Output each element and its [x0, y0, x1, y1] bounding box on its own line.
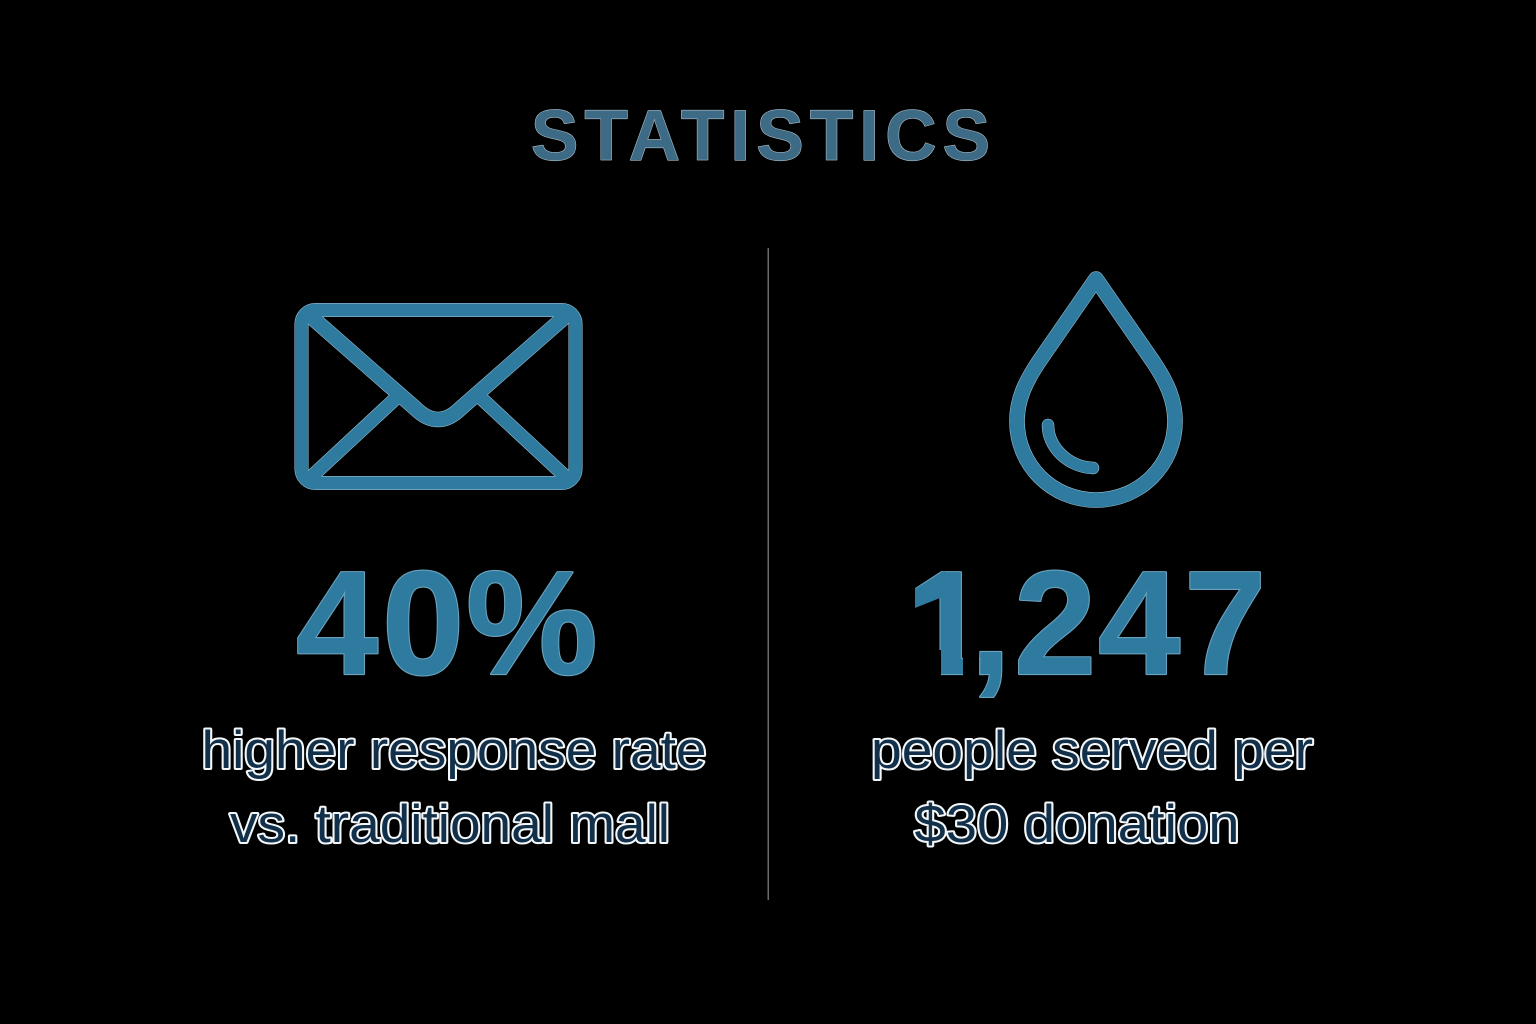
statistic: 40%: 40% [296, 541, 598, 706]
label: people served per: people served per [871, 721, 1313, 780]
title: STATISTICS [531, 97, 990, 176]
label: higher response rate: higher response rate [202, 721, 706, 780]
panel: response rate [202, 310, 706, 854]
label: vs. traditional mall: vs. traditional mall [230, 795, 670, 854]
divider [768, 248, 769, 900]
icon: envelope [302, 310, 576, 483]
statistic: 1,247: 1,247 [906, 541, 1266, 706]
panel: people served [871, 279, 1313, 854]
icon: water drop [1017, 279, 1175, 500]
label: $30 donation: $30 donation [914, 795, 1240, 854]
